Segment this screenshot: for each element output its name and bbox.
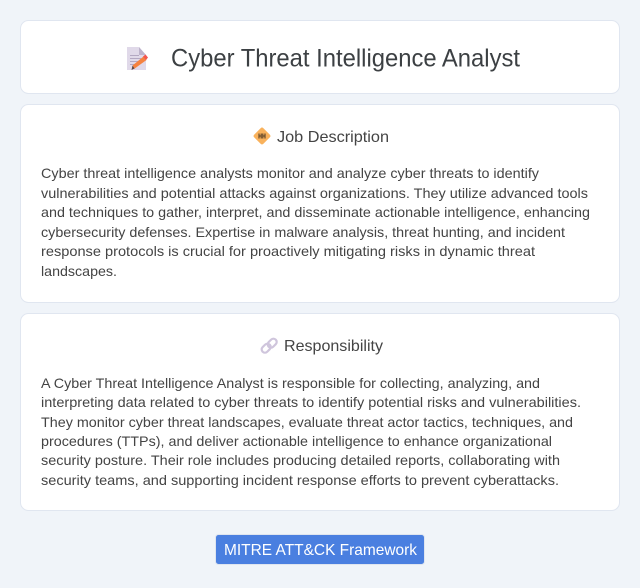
responsibility text: interpreting data related to cyber threats to identify potential risks and vulnerabilities. — [41, 394, 581, 410]
job description text — [41, 165, 590, 279]
job description text: and techniques to gather, interpret, and disseminate actionable intelligence, enhancing — [41, 204, 590, 220]
job description text: Cyber threat intelligence analysts monitor and analyze cyber threats to identify — [41, 165, 539, 181]
button: MITRE ATT&CK Framework: MITRE ATT&CK Framework — [224, 542, 418, 559]
responsibility text: security posture. Their role includes producing detailed reports, collaborating with — [41, 452, 560, 468]
job description text: response protocols is crucial for proactively mitigating risks in dynamic threat — [41, 243, 535, 259]
job description text: cybersecurity defenses. Expertise in malware analysis, threat hunting, and incident — [41, 224, 565, 240]
job description text: landscapes. — [41, 263, 117, 279]
responsibility text: A Cyber Threat Intelligence Analyst is responsible for collecting, analyzing, and — [41, 375, 540, 391]
icon: chain link — [260, 337, 278, 354]
responsibility text: security teams, and supporting incident response efforts to prevent cyberattacks. — [41, 472, 559, 488]
icon: orange diamond sign — [253, 127, 271, 145]
heading text: Responsibility — [284, 338, 383, 355]
heading text: Job Description — [277, 129, 389, 146]
responsibility text: procedures (TTPs), and deliver actionable intelligence to enhance organizational — [41, 433, 552, 449]
heading: job description — [253, 127, 389, 146]
job description text: vulnerabilities and potential attacks against organizations. They utilize advanced tools — [41, 185, 588, 201]
title: Cyber Threat Intelligence Analyst — [171, 44, 520, 72]
heading: responsibility — [260, 337, 383, 355]
button: MITRE ATT&CK Framework — [216, 534, 424, 564]
panel: responsibility — [20, 314, 620, 510]
panel: job description — [20, 104, 620, 302]
responsibility text: They monitor cyber threat landscapes, evaluate threat actor tactics, techniques, and — [41, 414, 573, 430]
responsibility text — [41, 375, 581, 488]
icon: document with pencil — [127, 47, 148, 70]
panel: title header — [20, 20, 620, 94]
